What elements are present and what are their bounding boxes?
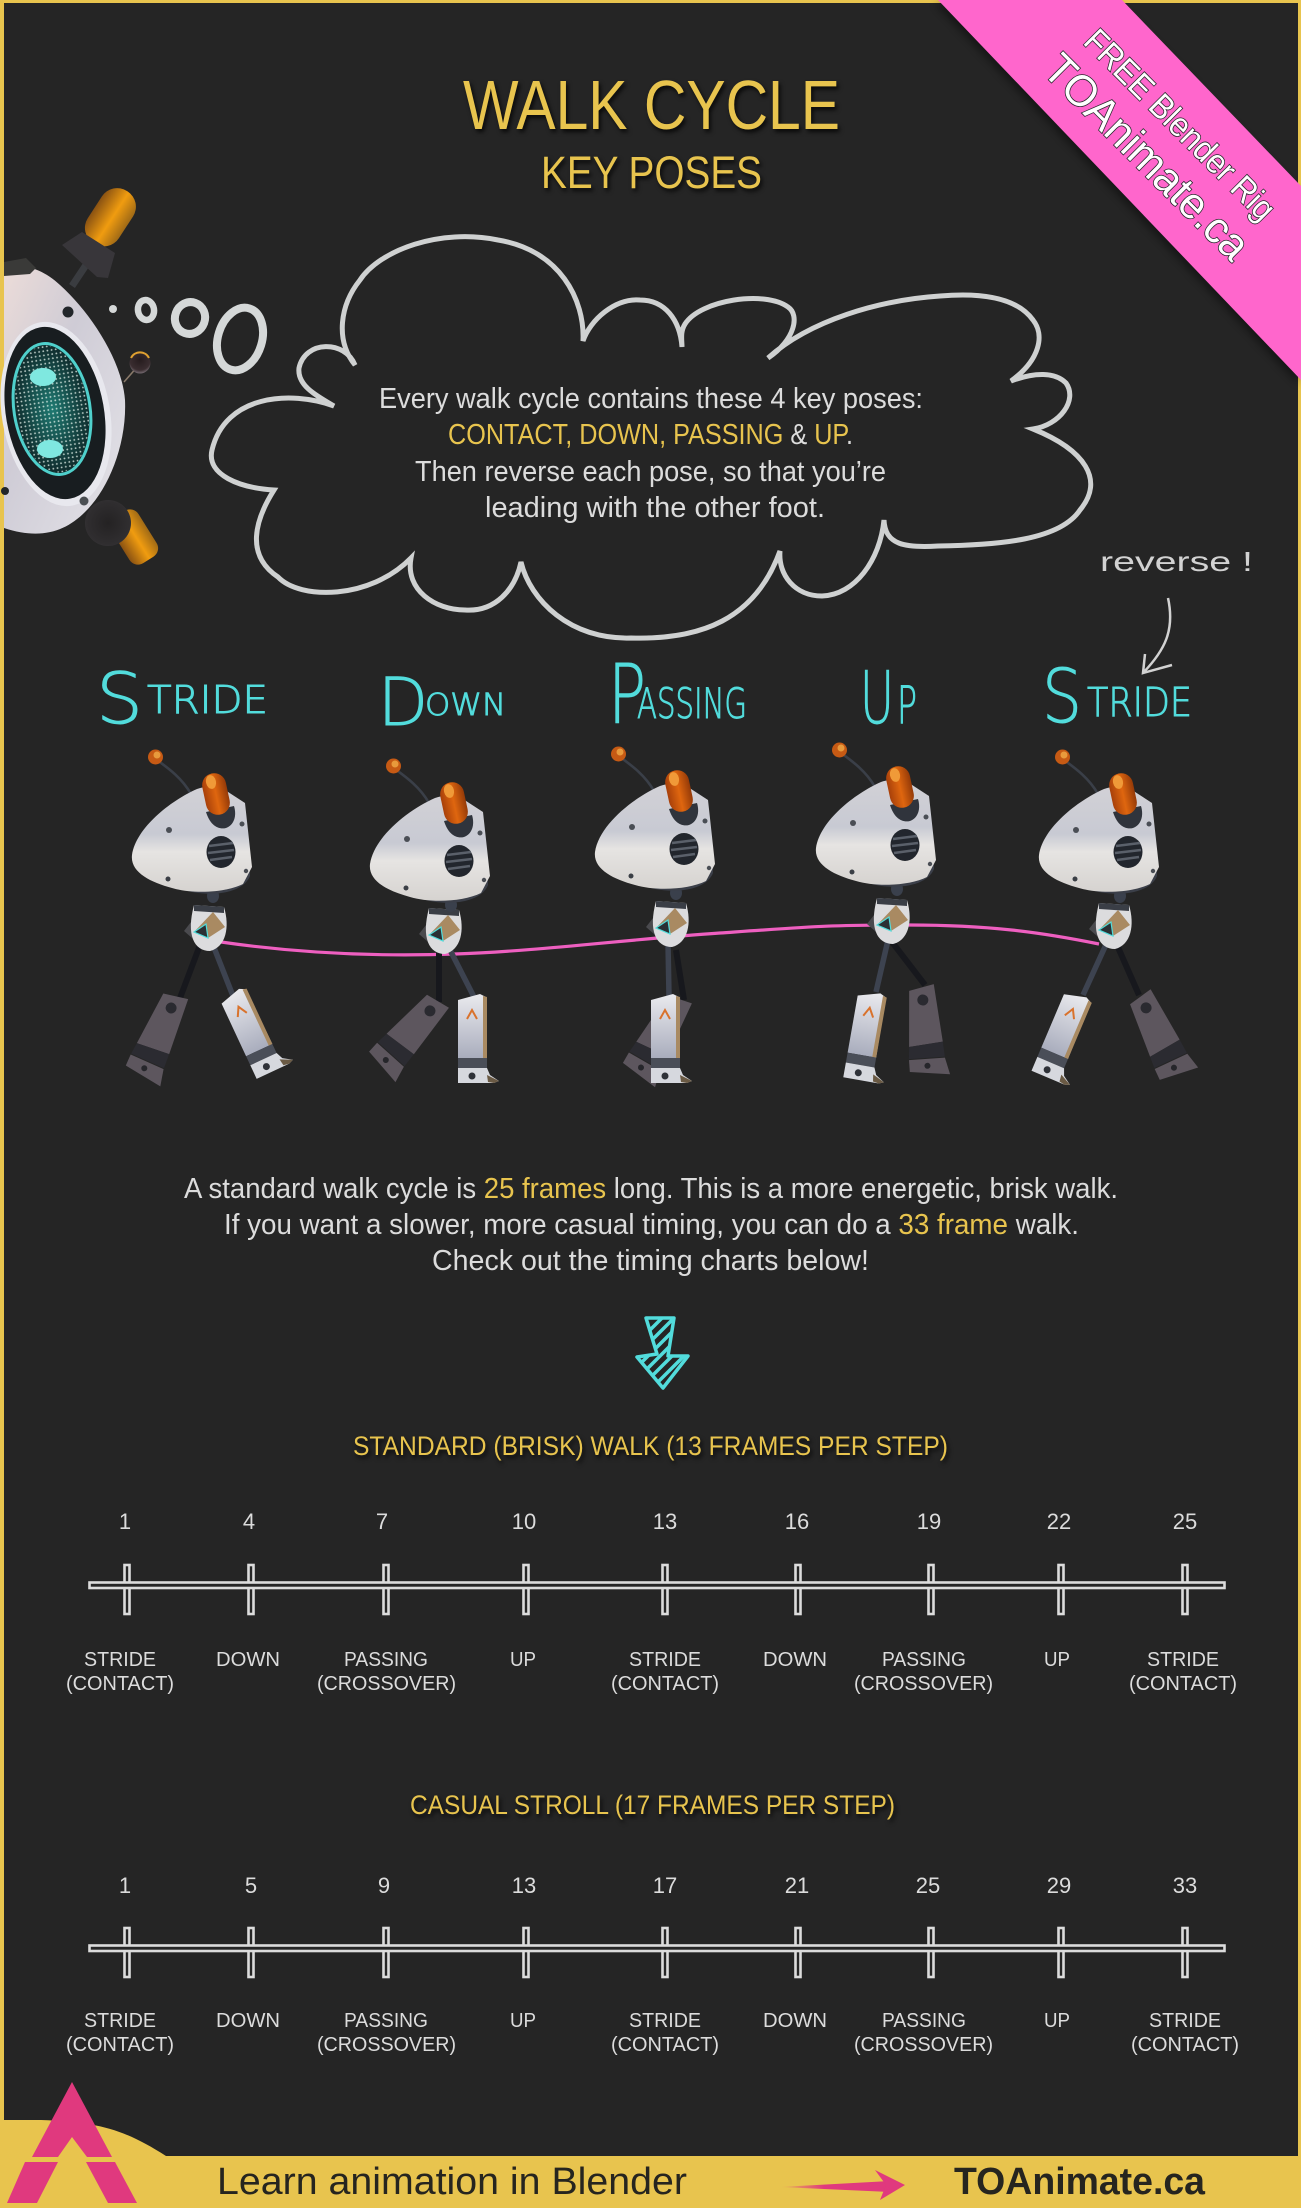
robot: passing	[595, 746, 715, 1087]
timeline	[90, 1928, 1224, 1977]
label: down: D	[378, 664, 428, 741]
label: passing	[608, 648, 747, 743]
frame numbers: 13	[512, 1873, 536, 1898]
robot peeking left	[0, 181, 162, 568]
antenna ball	[124, 352, 150, 382]
bottom lamp	[85, 500, 162, 568]
chart: casual stroll	[66, 1790, 1239, 2056]
cloud text: CONTACT, DOWN, PASSING & UP.	[448, 419, 853, 451]
frame numbers	[119, 1509, 1197, 1534]
label: up: P	[897, 676, 917, 736]
label: up: U	[860, 656, 894, 740]
pose names: UP	[1044, 2010, 1070, 2032]
frame numbers: 17	[653, 1873, 677, 1898]
pose names: (CONTACT)	[611, 1673, 719, 1695]
pose names	[66, 1649, 1237, 1695]
footer text: site: TOAnimate.ca	[954, 2161, 1206, 2203]
frame numbers: 19	[917, 1509, 941, 1534]
pose names: (CROSSOVER)	[854, 2034, 993, 2056]
frame numbers: 1	[119, 1509, 131, 1534]
explanation text: If you want a slower, more casual timing, you can do a 33 frame walk.	[224, 1209, 1079, 1241]
pose names: PASSING	[344, 2010, 428, 2032]
pose names: STRIDE	[629, 2010, 701, 2032]
footer band	[0, 2082, 1301, 2208]
pose names: (CROSSOVER)	[854, 1673, 993, 1695]
timeline	[90, 1565, 1224, 1614]
title	[463, 66, 840, 198]
pose names: STRIDE	[629, 1649, 701, 1671]
frame numbers: 7	[376, 1509, 388, 1534]
pose names: PASSING	[344, 1649, 428, 1671]
pose names: DOWN	[216, 2010, 280, 2032]
label: passing: ASSING	[637, 679, 747, 728]
frame numbers: 22	[1047, 1509, 1071, 1534]
pose names: (CONTACT)	[66, 2034, 174, 2056]
icon: hatched down arrow	[635, 1316, 690, 1390]
cloud text: leading with the other foot.	[485, 492, 825, 524]
pose names: DOWN	[216, 1649, 280, 1671]
pose names: STRIDE	[1149, 2010, 1221, 2032]
label: down: OWN	[425, 688, 506, 723]
pose names: PASSING	[882, 2010, 966, 2032]
frame numbers: 33	[1173, 1873, 1197, 1898]
robot: stride reversed	[1032, 750, 1198, 1087]
label: stride: TRIDE	[147, 678, 268, 722]
robot poses	[124, 742, 1198, 1087]
label: down	[378, 664, 506, 741]
pose names: (CONTACT)	[1129, 1673, 1237, 1695]
cloud text: Then reverse each pose, so that you’re	[415, 456, 886, 488]
robot: stride	[124, 750, 294, 1086]
frame numbers: 21	[785, 1873, 809, 1898]
cloud text	[379, 383, 923, 524]
pose names: UP	[510, 2010, 536, 2032]
explanation text	[184, 1173, 1118, 1277]
ribbon	[935, 0, 1301, 384]
pose names: DOWN	[763, 2010, 827, 2032]
vent	[4, 258, 36, 276]
pose names: STRIDE	[84, 2010, 156, 2032]
pose labels	[96, 648, 1192, 743]
pose names	[66, 2010, 1239, 2056]
frame numbers: 25	[1173, 1509, 1197, 1534]
frame numbers: 1	[119, 1873, 131, 1898]
reverse arrow	[1143, 598, 1172, 673]
footer arrow	[780, 2170, 905, 2200]
frame numbers: 13	[653, 1509, 677, 1534]
label: passing: P	[608, 648, 646, 743]
frame numbers: 10	[512, 1509, 536, 1534]
eye screen	[4, 338, 100, 480]
frame numbers	[119, 1873, 1197, 1898]
ribbon text: free rig: FREE Blender Rig	[1076, 22, 1283, 228]
pose names: UP	[510, 1649, 536, 1671]
pose names: STRIDE	[1147, 1649, 1219, 1671]
pose names: PASSING	[882, 1649, 966, 1671]
frame numbers: 25	[916, 1873, 940, 1898]
explanation text: A standard walk cycle is 25 frames long. This is a more energetic, brisk walk.	[184, 1173, 1118, 1205]
socket rim	[0, 313, 125, 515]
frame numbers: 9	[378, 1873, 390, 1898]
pose names: (CROSSOVER)	[317, 2034, 456, 2056]
title: WALK CYCLE	[463, 66, 840, 144]
chart: standard walk	[66, 1431, 1237, 1695]
subtitle: KEY POSES	[541, 147, 762, 198]
pose names: UP	[1044, 1649, 1070, 1671]
label: stride reversed: S	[1042, 654, 1082, 740]
chart heading: CASUAL STROLL (17 FRAMES PER STEP)	[410, 1790, 895, 1820]
note: reverse	[1100, 546, 1253, 673]
shell	[4, 266, 125, 534]
pose names: (CONTACT)	[66, 1673, 174, 1695]
robot: up	[816, 742, 950, 1084]
thought bubbles	[109, 298, 270, 376]
explanation text: Check out the timing charts below!	[432, 1245, 869, 1277]
footer logo	[7, 2082, 137, 2203]
robot: down	[366, 758, 499, 1083]
eye socket	[0, 319, 118, 507]
frame numbers: 5	[245, 1873, 257, 1898]
label: stride	[96, 658, 268, 740]
label: stride reversed	[1042, 654, 1192, 740]
label: stride reversed: TRIDE	[1087, 680, 1192, 726]
frame numbers: 16	[785, 1509, 809, 1534]
pose names: (CROSSOVER)	[317, 1673, 456, 1695]
ribbon text: site: TOAnimate.ca	[1034, 44, 1260, 270]
top lamp	[62, 181, 143, 286]
pose names: (CONTACT)	[1131, 2034, 1239, 2056]
hip height line	[221, 925, 1099, 955]
frame numbers: 29	[1047, 1873, 1071, 1898]
frame numbers: 4	[243, 1509, 255, 1534]
footer text: learn: Learn animation in Blender	[217, 2161, 687, 2203]
chart heading: STANDARD (BRISK) WALK (13 FRAMES PER STEP)	[353, 1431, 948, 1461]
note: reverse: reverse !	[1100, 546, 1253, 577]
thought cloud	[211, 237, 1091, 638]
pose names: STRIDE	[84, 1649, 156, 1671]
pose names: (CONTACT)	[611, 2034, 719, 2056]
cloud text: Every walk cycle contains these 4 key poses:	[379, 383, 923, 415]
label: stride: S	[96, 658, 143, 740]
pose names: DOWN	[763, 1649, 827, 1671]
